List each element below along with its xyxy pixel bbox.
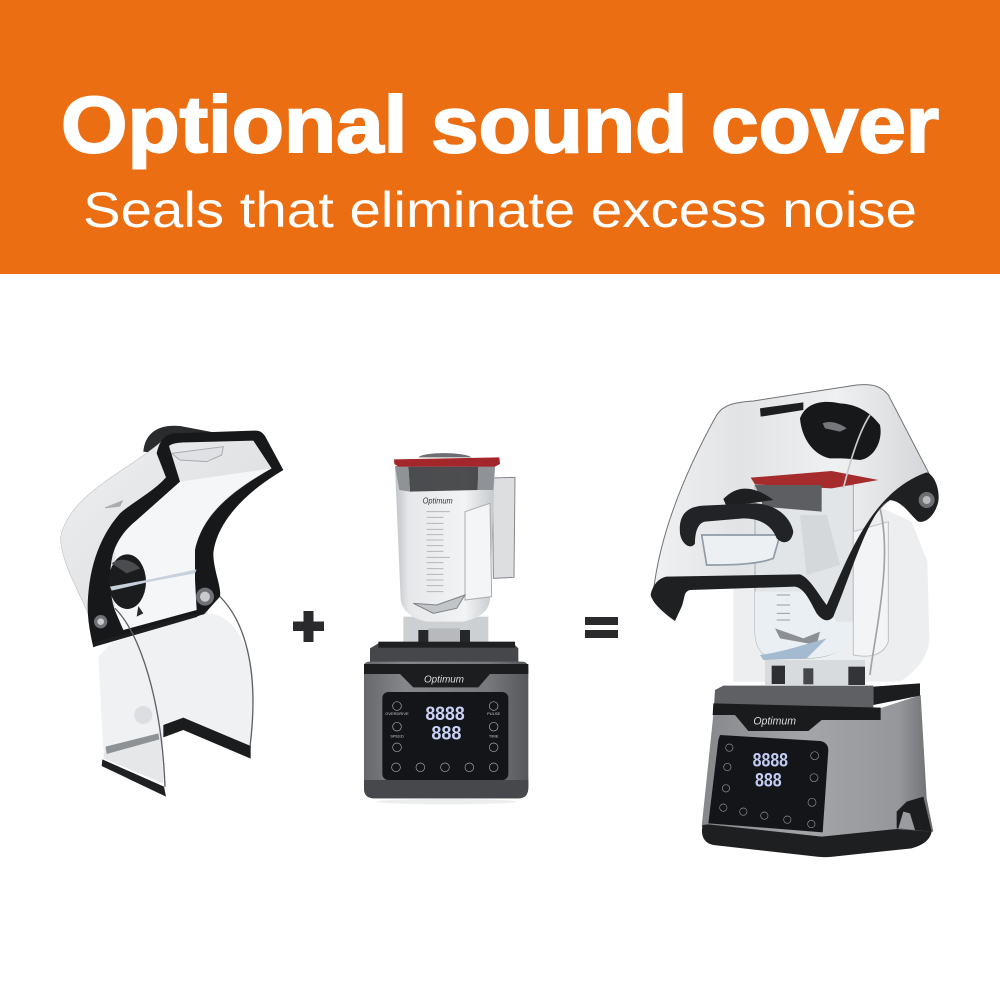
control panel [382,692,508,780]
jar handle [702,535,780,565]
bottom trim [364,780,528,798]
lid red band [394,457,500,467]
jar logo: Optimum [423,495,453,505]
jar neck [403,617,488,650]
jar pour channel [465,503,492,600]
button labels [385,711,501,738]
scale marks [777,595,790,620]
sound baffle ball [109,554,197,617]
time display: 8888 [753,750,788,771]
base top [714,686,873,708]
button labels: PULSE [487,711,501,716]
top window highlight [172,447,223,462]
jar blades [775,628,820,645]
speed display: 888 [755,770,782,791]
jar handle [477,477,515,578]
base body [364,662,528,798]
curved glass edges [115,597,253,787]
inner curved panel [870,508,885,675]
dome [653,385,937,615]
black seal frame [88,431,283,647]
back handle [143,426,215,453]
base metal body [702,695,933,842]
jar dark collar [408,467,478,492]
base top [370,643,518,663]
speed display: 888 [431,723,462,744]
sensor disc [134,706,152,724]
bottom trim [702,824,932,857]
button labels: SPEED [390,733,404,738]
rear foot [897,797,932,832]
right foot strip [163,718,251,759]
grip handle [680,503,793,546]
jar lid [751,471,878,488]
blades [413,595,465,613]
eyelet [919,492,935,508]
cover base logo: Optimum [753,715,796,727]
rear handle shadow [723,489,773,507]
time display: 8888 [425,704,465,725]
cover logo tag [760,402,803,417]
subtitle: Seals that eliminate excess noise [83,182,917,238]
buttons [392,702,498,772]
right eyelet [196,588,214,606]
blade coupler [418,630,470,648]
lid top [418,453,472,457]
blender with sound cover [651,385,939,857]
measuring scale [427,512,450,592]
left foot plate [106,733,159,754]
jar rear handle [853,522,888,656]
shadow [377,799,517,804]
right hinge block [873,683,920,705]
control panel [708,735,828,832]
black band [364,664,528,687]
lower shell [98,614,253,783]
hinge strip [93,615,197,645]
title: Optional sound cover [61,80,939,169]
black band [713,703,881,731]
button labels: OVERDRIVE [385,711,409,716]
left eyelet [94,615,107,628]
buttons [720,744,819,828]
button labels: TIME [489,733,499,738]
upper shell [61,440,272,645]
cover glass crease [843,415,870,488]
orange header banner [0,0,1000,274]
coupler area [765,660,865,685]
blender product [364,453,528,804]
left foot strip [102,759,166,797]
equals sign [585,617,618,638]
base logo: Optimum [424,674,464,685]
jar stem details [800,515,840,575]
rear shell [733,492,929,682]
baffle [800,402,881,460]
jar body inside [755,485,853,658]
plus sign [293,611,324,642]
sound cover product [61,426,283,797]
black seal frame [651,472,939,621]
jar body [395,466,495,622]
